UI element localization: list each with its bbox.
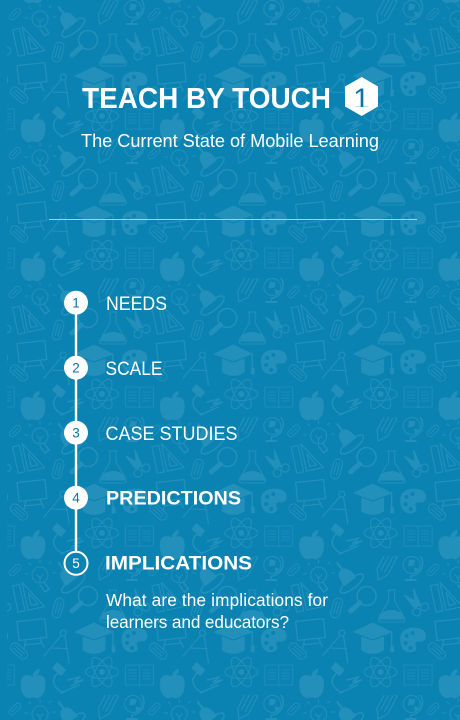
step 1: needs — [64, 291, 167, 315]
step 2: scale — [64, 356, 162, 380]
step 3: case studies — [64, 421, 238, 445]
step 4: predictions: PREDICTIONS — [106, 488, 241, 510]
step 2: scale: 2 — [72, 360, 80, 376]
step 1: needs: NEEDS — [106, 293, 167, 315]
description text — [106, 590, 328, 632]
step 3: case studies: CASE STUDIES — [106, 423, 238, 445]
step 2: scale: SCALE — [106, 358, 162, 380]
description text: learners and educators? — [106, 612, 289, 632]
step 5: implications: 5 — [72, 556, 80, 571]
title: TEACH BY TOUCH — [82, 83, 331, 115]
timeline list — [64, 291, 252, 575]
step 1: needs: 1 — [72, 296, 80, 310]
icon: hexagon badge with number 1 — [345, 77, 378, 116]
step 5: implications: IMPLICATIONS — [105, 552, 252, 574]
step 4: predictions: 4 — [72, 490, 80, 506]
icon: hexagon badge with number 1: 1 — [353, 83, 370, 116]
step 3: case studies: 3 — [72, 426, 80, 440]
foreground content — [49, 77, 417, 628]
description text: What are the implications for — [106, 590, 328, 610]
step 4: predictions — [64, 486, 241, 510]
subtitle: The Current State of Mobile Learning — [81, 131, 379, 151]
